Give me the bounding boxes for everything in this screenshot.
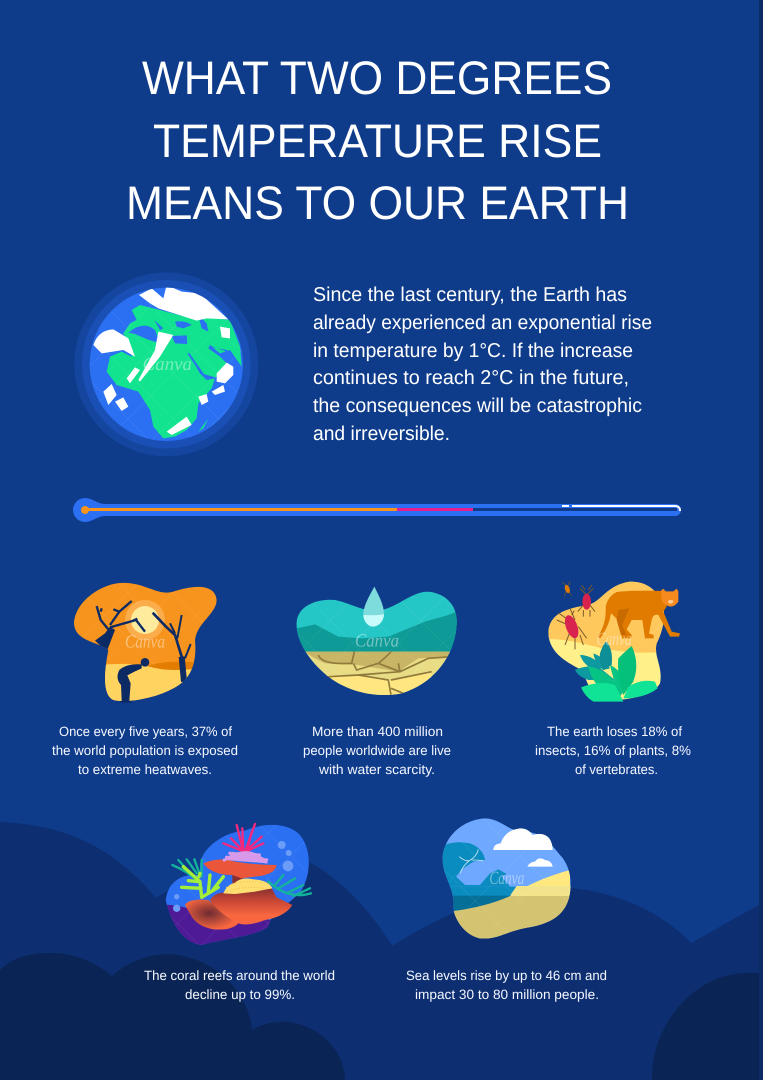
background hills: dark layer	[0, 953, 759, 1080]
caption: decline up to 99%.	[185, 987, 295, 1002]
intro paragraph: already experienced an exponential rise	[313, 312, 652, 334]
caption	[144, 968, 335, 1002]
icon: beach with waves and clouds: Canva	[489, 868, 524, 888]
icon: dry cracked land with water drop: Canva	[355, 630, 399, 651]
caption	[52, 724, 238, 777]
intro paragraph: continues to reach 2°C in the future,	[313, 367, 629, 389]
caption: to extreme heatwaves.	[78, 762, 212, 777]
title: TEMPERATURE RISE	[153, 114, 602, 167]
puma	[598, 591, 680, 638]
background hills: middle layer	[0, 822, 759, 1080]
intro paragraph: in temperature by 1°C. If the increase	[313, 340, 633, 362]
caption	[303, 724, 451, 777]
water drop	[363, 587, 384, 627]
lilac coral polyps	[224, 853, 268, 863]
icon: coral reef	[166, 822, 312, 945]
red-orange coral tables	[232, 873, 243, 888]
right dead tree	[153, 613, 184, 682]
caption: the world population is exposed	[52, 743, 238, 758]
pink sea fan	[223, 824, 263, 852]
icon: dry cracked land with water drop	[296, 586, 457, 695]
icon: earth globe	[74, 272, 258, 456]
person bending over	[118, 658, 149, 703]
teal sea plants	[172, 859, 311, 896]
panel: sea level	[406, 810, 607, 1002]
caption: More than 400 million	[312, 724, 443, 739]
intro paragraph: the consequences will be catastrophic	[313, 395, 642, 417]
title: WHAT TWO DEGREES	[142, 51, 612, 104]
title: MEANS TO OUR EARTH	[126, 176, 629, 229]
panel: heatwaves	[52, 570, 238, 777]
panel: water scarcity	[296, 586, 457, 777]
icon: earth globe: Canva	[143, 354, 192, 374]
insects	[557, 585, 595, 649]
caption: Sea levels rise by up to 46 cm and	[406, 968, 607, 983]
left dead tree	[95, 627, 115, 652]
caption: impact 30 to 80 million people.	[415, 987, 599, 1002]
icon: puma, insects and plants: Canva	[597, 629, 632, 649]
yellow coral polyps	[223, 879, 272, 894]
caption	[406, 968, 607, 1002]
title	[126, 51, 629, 229]
icon: beach with waves and clouds	[442, 818, 571, 938]
caption: The coral reefs around the world	[144, 968, 335, 983]
thermometer bar	[73, 498, 681, 522]
wave line	[459, 849, 483, 873]
caption: insects, 16% of plants, 8%	[535, 743, 691, 758]
caption: with water scarcity.	[318, 762, 435, 777]
icon: puma, insects and plants	[548, 580, 680, 702]
caption: of vertebrates.	[575, 762, 658, 777]
clouds	[493, 828, 553, 850]
caption: The earth loses 18% of	[547, 724, 682, 739]
intro paragraph: and irreversible.	[313, 423, 450, 445]
icon: drought scene with sun, trees and person: Canva	[125, 631, 165, 652]
caption: Once every five years, 37% of	[59, 724, 232, 739]
intro paragraph: Since the last century, the Earth has	[313, 284, 627, 306]
plants	[575, 653, 615, 680]
bubbles	[173, 841, 293, 912]
caption	[535, 724, 691, 777]
icon: drought scene with sun, trees and person	[74, 582, 217, 703]
intro paragraph	[313, 284, 652, 445]
green coral	[182, 867, 223, 897]
caption: people worldwide are live	[303, 743, 451, 758]
panel: coral reefs	[144, 810, 335, 1002]
right edge strip	[759, 0, 763, 1080]
panel: biodiversity	[535, 570, 695, 777]
